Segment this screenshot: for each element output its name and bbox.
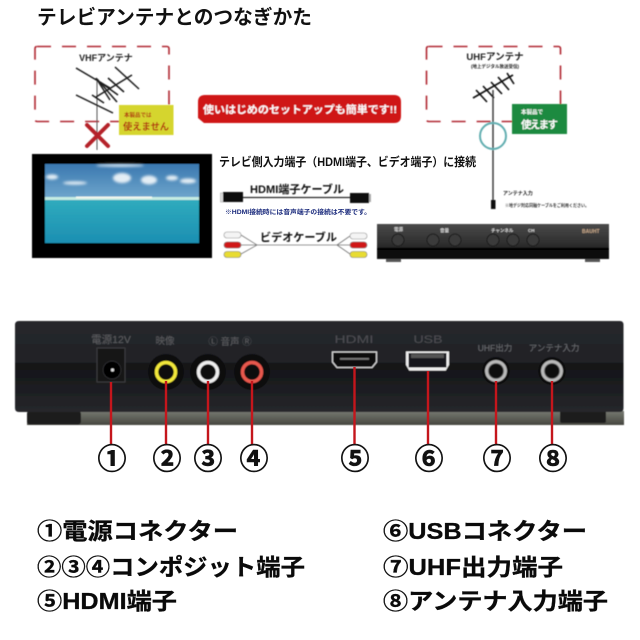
tuner rear panel photo <box>15 321 624 425</box>
tuner front view <box>377 224 609 262</box>
UHF dashed frame <box>426 46 560 122</box>
connector numbers: ⑥ <box>414 443 444 476</box>
VHF callout: 本製品では <box>124 111 152 119</box>
USB port <box>406 334 450 371</box>
power jack <box>91 333 131 382</box>
HDMI port <box>332 334 376 368</box>
tv screen <box>45 164 199 243</box>
connector numbers <box>97 443 568 476</box>
panel: VHF antenna <box>35 46 174 150</box>
audio label: Ⓛ 音声 Ⓡ <box>208 336 252 348</box>
USB label: USB <box>414 334 442 346</box>
icon: teal circle <box>480 123 506 149</box>
icon: VHF antenna <box>76 67 139 150</box>
red banner: 使いはじめのセットアップも簡単です!! <box>203 103 397 116</box>
HDMI label: HDMI <box>334 334 374 346</box>
icon: red X <box>87 125 108 146</box>
connector numbers: ⑦ <box>482 443 512 476</box>
UHF output jack <box>478 343 512 385</box>
red banner <box>198 95 401 123</box>
HDMI note: ※HDMI接続時には音声端子の接続は不要です。 <box>225 207 371 216</box>
legend: right column <box>383 518 608 614</box>
connector numbers: ⑤ <box>340 443 370 476</box>
rear body <box>15 321 624 412</box>
legend: left column <box>37 518 305 614</box>
legend: left column: ⑤HDMI端子 <box>37 588 177 614</box>
UHF output label: UHF出力 <box>478 343 512 353</box>
power label: 電源12V <box>91 333 131 346</box>
connector numbers: ④ <box>239 443 269 476</box>
left foot <box>27 411 81 424</box>
front knobs <box>392 234 539 246</box>
front labels: チャンネル <box>491 227 514 234</box>
VHF dashed frame <box>35 46 169 122</box>
antenna input label: アンテナ入力 <box>529 343 579 353</box>
VHF label: VHFアンテナ <box>79 53 133 63</box>
connector numbers: ① <box>97 443 127 476</box>
legend: right column: ⑧アンテナ入力端子 <box>383 588 608 614</box>
audio R jack <box>234 354 270 390</box>
front labels: 電源 <box>394 226 403 233</box>
audio L jack <box>190 354 226 390</box>
VHF callout: 使えません <box>123 121 169 133</box>
antenna input jack <box>529 343 579 385</box>
legend: left column: ①電源コネクター <box>37 518 238 544</box>
front labels: BAUHT <box>582 229 600 235</box>
connection heading: テレビ側入力端子（HDMI端子、ビデオ端子）に接続 <box>219 154 476 169</box>
front labels: CH <box>528 228 534 233</box>
video cable <box>224 230 367 258</box>
UHF callout: 本製品で <box>521 108 544 116</box>
HDMI cable <box>220 182 371 203</box>
bottom strip <box>27 411 624 425</box>
panel: UHF antenna <box>426 46 589 209</box>
front labels <box>394 226 600 235</box>
antenna note: ※地デジ対応同軸ケーブルをご利用ください。 <box>505 202 589 209</box>
UHF sublabel: (地上デジタル放送受信) <box>471 63 519 70</box>
connector numbers: ② <box>152 443 182 476</box>
title: テレビアンテナとのつなぎかた <box>37 5 312 29</box>
video label: 映像 <box>155 335 175 347</box>
HDMI cable label: HDMI端子ケーブル <box>250 182 344 196</box>
UHF label: UHFアンテナ <box>466 52 524 63</box>
right foot <box>560 411 606 423</box>
legend: left column: ②③④コンポジット端子 <box>37 554 305 580</box>
front labels: 音量 <box>440 227 449 234</box>
connector numbers: ③ <box>193 443 223 476</box>
UHF callout: 使えます <box>521 118 558 131</box>
video cable label: ビデオケーブル <box>260 230 337 244</box>
red callout lines <box>111 367 552 444</box>
UHF callout <box>512 104 567 134</box>
icon: UHF antenna <box>473 73 514 201</box>
antenna plug <box>491 200 496 209</box>
VHF callout <box>119 105 174 135</box>
legend: right column: ⑦UHF出力端子 <box>383 554 563 580</box>
antenna input label: アンテナ入力 <box>503 190 533 197</box>
panel: television <box>32 154 212 258</box>
connector numbers: ⑧ <box>538 443 568 476</box>
video jack <box>148 335 184 390</box>
legend: right column: ⑥USBコネクター <box>383 518 587 544</box>
